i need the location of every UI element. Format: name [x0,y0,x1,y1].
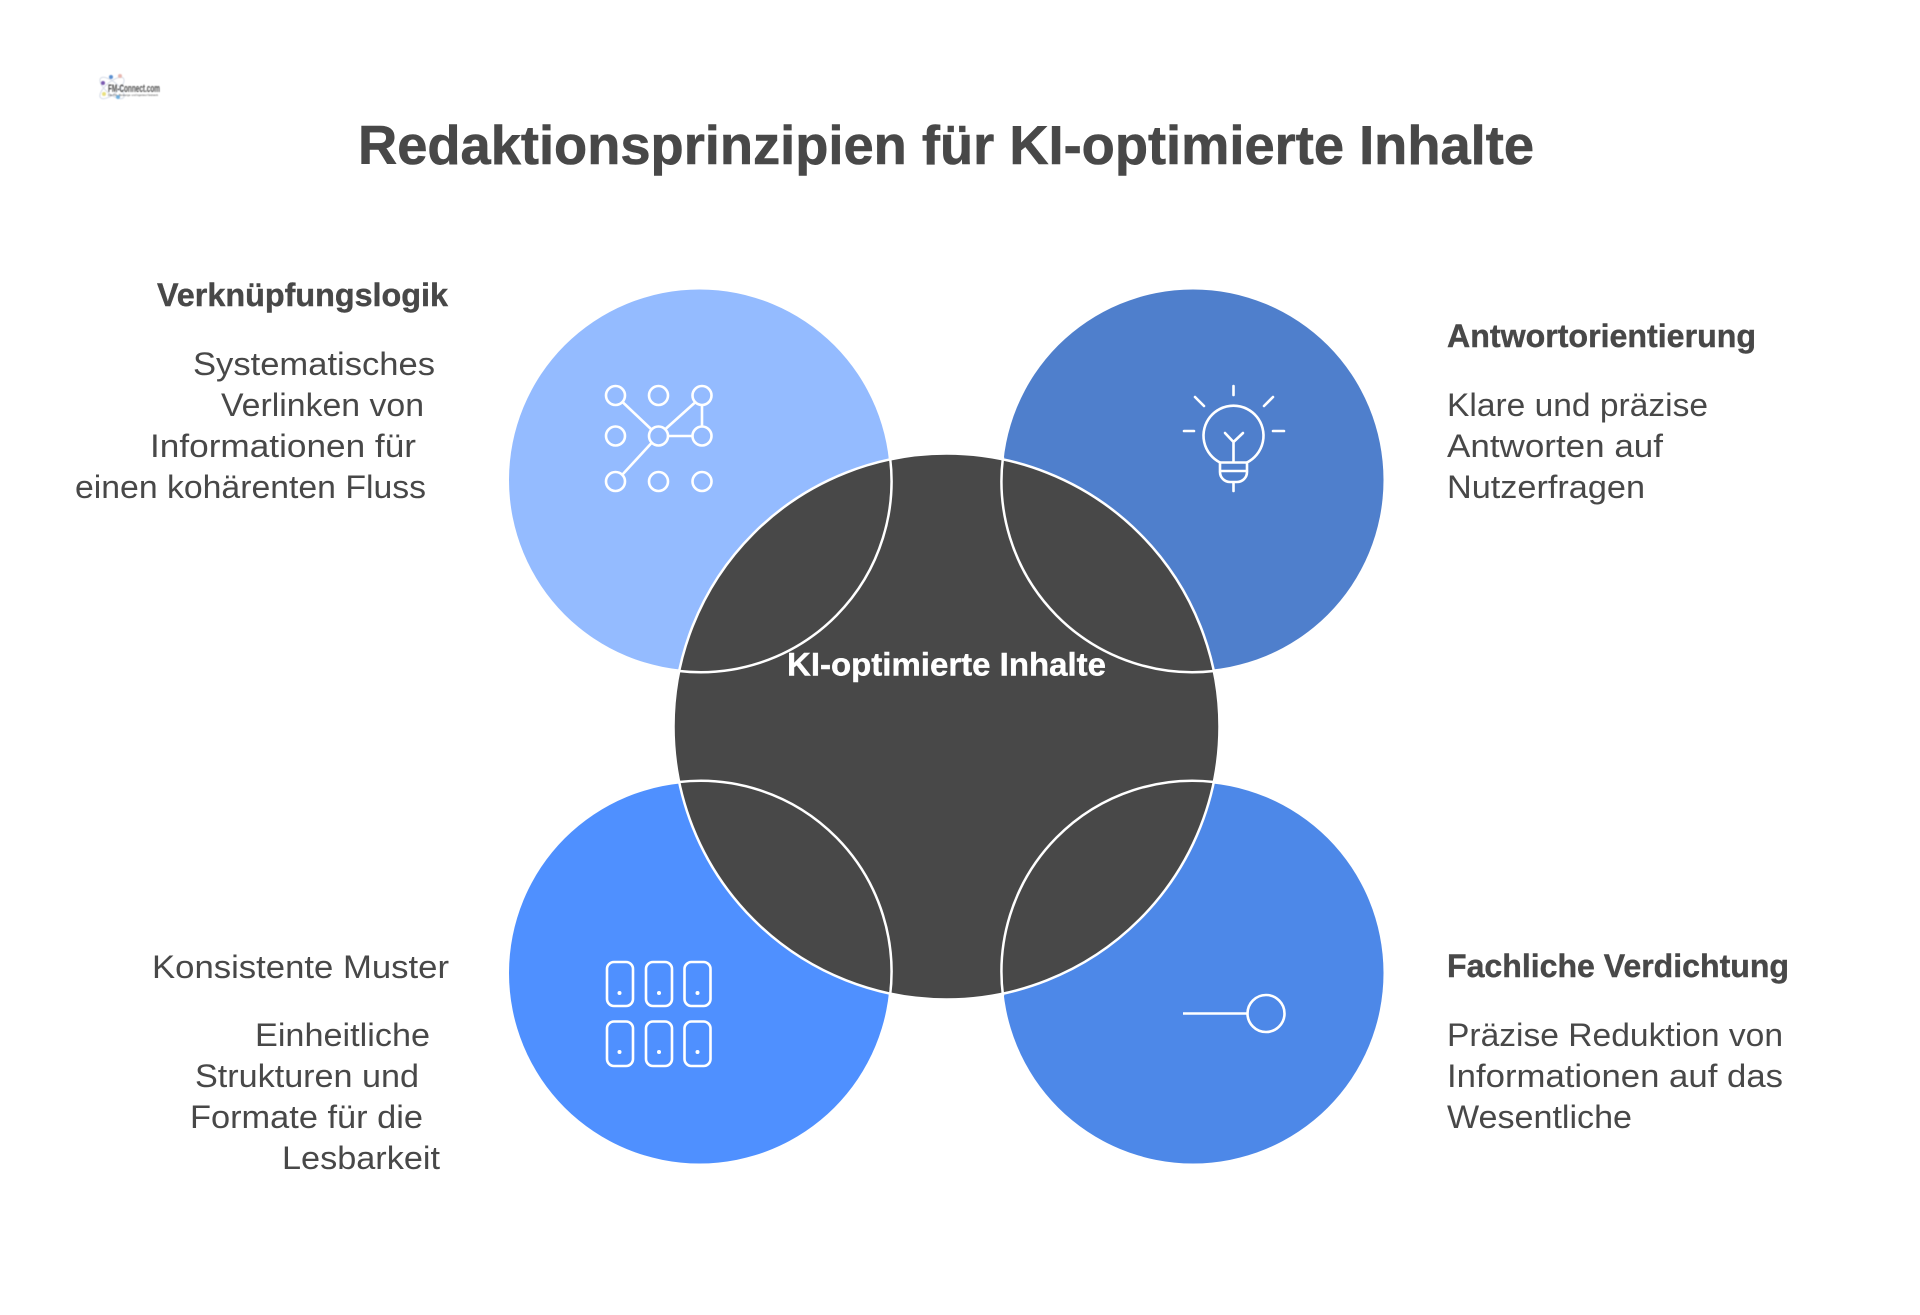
text block: Verknüpfungslogik [75,277,448,505]
text block: Verknüpfungslogik: Systematisches [193,346,435,382]
icon: network [606,386,712,491]
text block: Antwortorientierung: Nutzerfragen [1447,469,1645,505]
text block: Konsistente Muster: Formate für die [190,1099,423,1135]
text block: Konsistente Muster: Konsistente Muster [152,949,449,985]
text block: Fachliche Verdichtung: Wesentliche [1447,1099,1632,1135]
text block: Fachliche Verdichtung: Fachliche Verdichtung [1447,948,1789,984]
text block: Fachliche Verdichtung [1447,948,1789,1135]
logo [97,74,160,102]
text block: Konsistente Muster: Lesbarkeit [282,1140,440,1176]
icon: light bulb [1184,386,1284,491]
text block: Konsistente Muster: Einheitliche [255,1017,430,1053]
text block: Antwortorientierung: Antwortorientierung [1447,318,1756,354]
central circle [674,454,1220,1000]
text block: Antwortorientierung: Klare und präzise [1447,387,1708,423]
icon: line with circle [1183,995,1284,1032]
center label: KI-optimierte Inhalte [787,646,1106,682]
title: Redaktionsprinzipien für KI-optimierte Inhalte [358,114,1534,176]
text block: Verknüpfungslogik: einen kohärenten Fluss [75,469,426,505]
text block: Konsistente Muster [152,949,449,1176]
text block: Verknüpfungslogik: Verlinken von [221,387,424,423]
logo: FM-Connect.com [108,83,160,95]
text block: Fachliche Verdichtung: Informationen auf das [1447,1058,1783,1094]
logo: Das FM-, Beratungs- und Ingenieur-Netzwerk [108,93,158,97]
text block: Konsistente Muster: Strukturen und [195,1058,419,1094]
text block: Verknüpfungslogik: Verknüpfungslogik [157,277,448,313]
circle: Fachliche Verdichtung [1002,782,1384,1164]
text block: Verknüpfungslogik: Informationen für [150,428,416,464]
circle: Antwortorientierung [1002,290,1384,670]
text block: Antwortorientierung [1447,318,1756,505]
icon: grid of tiles [607,962,710,1066]
circle: Konsistente Muster [509,782,890,1164]
circle: Verknüpfungslogik [509,290,890,670]
text block: Fachliche Verdichtung: Präzise Reduktion von [1447,1017,1783,1053]
text block: Antwortorientierung: Antworten auf [1447,428,1663,464]
overlap outlines [679,457,1214,996]
